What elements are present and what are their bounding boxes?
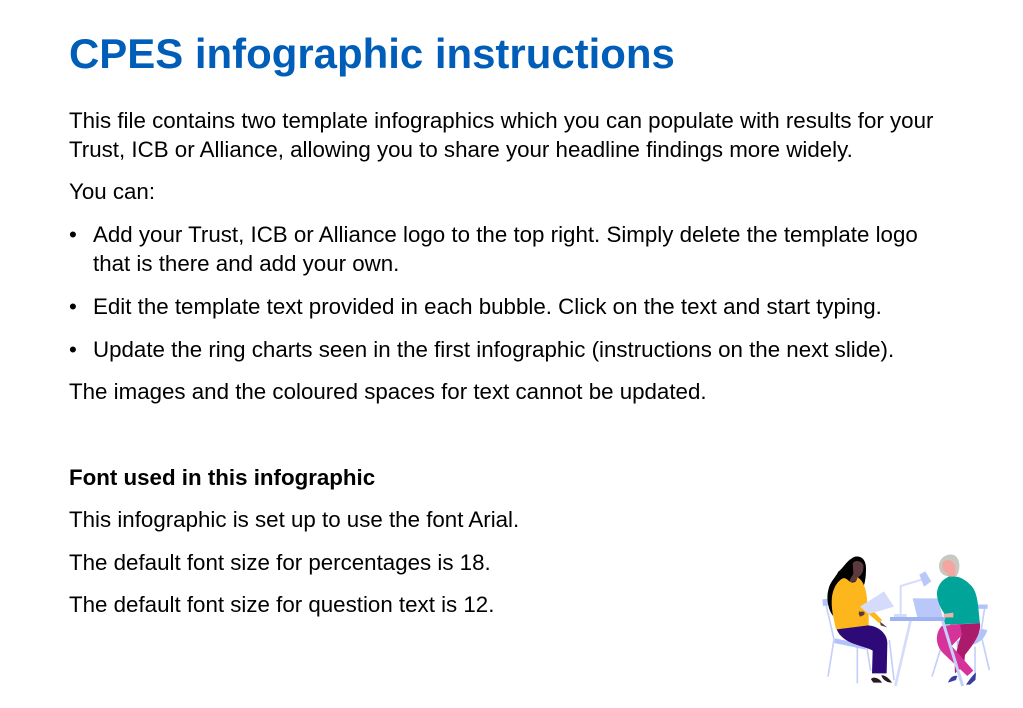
bullet: add logo: • <box>69 222 77 247</box>
table front leg <box>943 621 963 686</box>
title: CPES infographic instructions <box>69 30 675 77</box>
woman left <box>827 556 892 683</box>
percentage font size note: The default font size for percentages is 18. <box>69 550 491 575</box>
bullet: edit text: • <box>69 294 77 319</box>
intro paragraph: Trust, ICB or Alliance, allowing you to share your headline findings more widely. <box>69 137 853 162</box>
left chair <box>823 602 894 683</box>
images note: The images and the coloured spaces for text cannot be updated. <box>69 379 707 404</box>
lamp <box>894 571 931 617</box>
bullet: update ring charts: • <box>69 337 77 362</box>
question font size note: The default font size for question text is 12. <box>69 592 494 617</box>
font heading: Font used in this infographic <box>69 465 375 490</box>
table <box>890 617 968 686</box>
you can label: You can: <box>69 179 155 204</box>
bullet: update ring charts: Update the ring charts seen in the first infographic (instructions on the next slide). <box>93 337 894 362</box>
bullet: edit text: Edit the template text provided in each bubble. Click on the text and start typing. <box>93 294 882 319</box>
bullet: add logo <box>69 222 918 276</box>
paper <box>860 591 894 614</box>
font note: This infographic is set up to use the font Arial. <box>69 507 519 532</box>
right chair <box>932 607 989 680</box>
woman right <box>937 554 980 685</box>
laptop <box>913 598 943 617</box>
illustration: two people at a table <box>822 554 990 686</box>
intro paragraph: This file contains two template infographics which you can populate with results for your <box>69 108 933 133</box>
bullet: add logo: that is there and add your own. <box>93 251 399 276</box>
intro paragraph <box>69 108 934 162</box>
bullet: add logo: Add your Trust, ICB or Alliance logo to the top right. Simply delete the template logo <box>93 222 918 247</box>
